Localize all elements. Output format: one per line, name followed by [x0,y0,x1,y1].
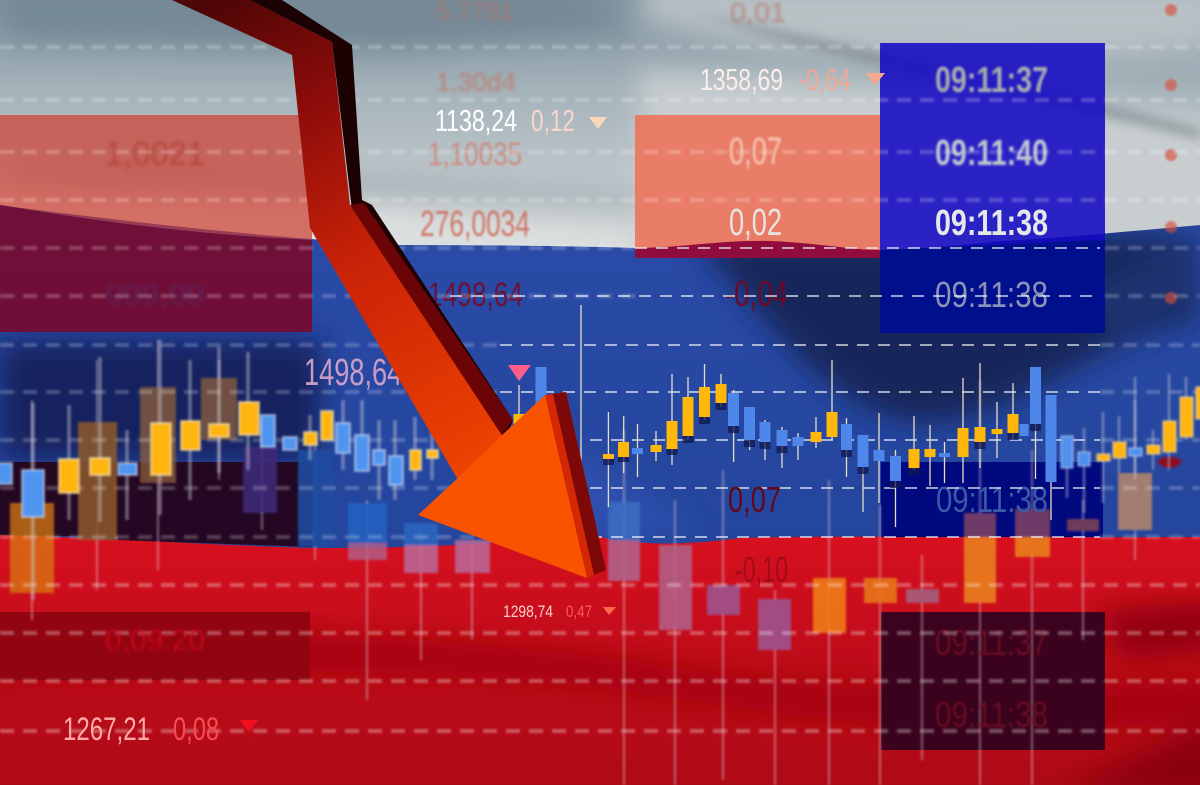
time: 09:11:37 dark: 09:11:37 [935,622,1048,663]
chart: blurred right candles [1061,374,1200,513]
arrow: head side face [545,392,606,578]
panel: dark band left [0,462,312,547]
flag: red folds [0,600,1200,785]
value: 1498,64 dark: 1498,64 [428,276,523,314]
value: 0,02: 0,02 [729,202,782,244]
value: 999,99: 999,99 [105,279,205,312]
value: 0,47: 0,47 [566,602,592,621]
panel: navy time block lower [881,462,1103,537]
arrow: head dark side [553,392,606,575]
time column text [935,59,1048,735]
flag: white folds [0,0,1200,270]
candle wicks [519,305,1051,527]
time: 09:11:37: 09:11:37 [935,59,1048,100]
time: 09:11:38: 09:11:38 [935,202,1048,243]
value: 1298,74: 1298,74 [503,602,553,621]
value: -0,64: -0,64 [798,62,851,97]
faded background candles [10,340,1182,785]
value: 1138,24: 1138,24 [435,103,517,138]
table text: upper rows [105,0,885,314]
value: 0,07: 0,07 [729,131,782,173]
value: 1358,69: 1358,69 [700,62,783,97]
arrow: shaft front [172,0,505,500]
candles: orange [514,384,1018,468]
flag: top fold crease [690,10,1200,140]
value: -0,04: -0,04 [725,273,788,314]
icon: down triangle [589,117,607,129]
value: 1,0021: 1,0021 [105,135,205,173]
icon: red down triangle [240,720,258,732]
value: 1498,64: 1498,64 % [304,352,434,394]
chart: sharp center candles [514,305,1056,527]
value: 0,08: 0,08 [173,711,219,747]
value: 1,10035: 1,10035 [428,136,522,172]
time: 09:11:38 blue: 09:11:38 [936,479,1048,520]
flag: white stripe [0,0,1200,270]
arrow: shaft lower side [350,203,513,436]
chart: blurred left candles [0,340,438,600]
arrow: falling red-orange arrow [172,0,606,578]
time: 09:11:38 faded: 09:11:38 [935,274,1048,315]
icon: pink down triangle [508,365,531,381]
value: 0,09 dark left: 0,09:20 [105,624,205,657]
value: 0,12: 0,12 [531,103,575,138]
value: second row left: 1,30d4 [436,67,516,97]
candles: blue [536,367,1056,482]
time: 09:11:38 dark: 09:11:38 [935,694,1048,735]
panel: left table salmon block [0,115,312,332]
icon: small down triangle [603,607,616,615]
arrow: head front [418,395,587,578]
value: -0,10 dark: -0,10 [735,549,788,590]
flag: blue folds [0,230,1200,540]
arrow: shaft side shadow [250,0,513,440]
panel: time column blue block [880,43,1105,333]
markers: right edge dots [1165,4,1177,304]
value: 0,07 dark: 0,07 [728,479,781,520]
panel: lower left dark red block [0,612,310,680]
value: 276,0034: 276,0034 [420,203,530,244]
panel: lower right dark block [881,612,1105,750]
flag: red stripe [0,530,1200,785]
candle shadows [603,403,1041,488]
time: 09:11:40: 09:11:40 [935,132,1048,173]
panel: center table salmon block [635,115,880,258]
icon: down triangle [866,73,885,85]
flag: blue stripe [0,190,1200,560]
value: 1267,21: 1267,21 [63,711,150,747]
